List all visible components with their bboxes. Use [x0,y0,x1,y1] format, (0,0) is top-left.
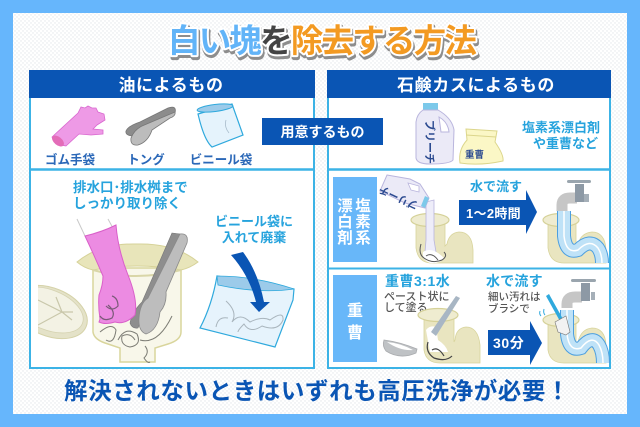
step text: flush: 水で流す [470,179,522,194]
step text: brush small dirt [488,290,541,315]
title: 白い塊を除去する方法 [168,23,476,59]
badge: items to prepare [262,118,383,145]
step label: baking soda [333,275,377,362]
water flow [567,310,603,363]
tilted bottle: ブリーチ [377,183,420,212]
step text: brush small dirt: 細い汚れは [488,290,541,303]
panel: soap scum [327,70,611,368]
hair in trap [420,244,446,263]
illustration: drain with glove and tongs [38,218,199,363]
step text: apply as paste: して塗る [384,300,428,314]
caption: remove down to the trap: しっかり取り除く [73,195,181,211]
icon: tongs [126,107,175,145]
drain lid [38,284,88,340]
illustration: faucet and trap flushing [543,180,606,263]
illustration: paste dish [383,340,417,356]
label: tongs: トング [127,152,165,167]
poured stream [425,200,436,252]
label: plastic bag: ビニール袋 [190,152,253,167]
step text: apply as paste: ペースト状に [384,289,449,303]
illustration: plastic bag with waste [200,276,294,347]
step label: bleach: 素 [355,213,371,231]
badge: items to prepare: 用意するもの [280,124,364,140]
step text: baking soda mix: 重曹3:1水 [385,273,450,289]
panel heading: oil [29,70,315,98]
icon: rubber glove [50,106,105,149]
trap [411,214,473,263]
step label: bleach: 剤 [337,229,353,247]
step label: bleach: 系 [355,229,371,247]
step label: bleach: 塩 [355,197,371,215]
arrow: 1 to 2 hours: 1〜2時間 [466,206,521,221]
icon: baking soda bag [460,129,503,164]
icon: bleach bottle [416,103,454,164]
hand in glove [77,219,136,324]
caption: remove down to the trap [73,179,188,211]
step label: baking soda: 曹 [347,324,363,342]
illustration: trap with paste [418,296,480,363]
step text: brush small dirt: ブラシで [488,302,530,315]
panel: oil [5,70,315,368]
arrow: into bag [231,252,270,312]
panel heading: soap scum: 石鹸カスによるもの [397,76,555,95]
faucet [567,279,596,308]
step text: apply as paste [384,289,449,314]
step label: baking soda: 重 [347,302,363,320]
arrow: 1 to 2 hours [459,190,537,234]
title: 白い塊を除去する方法 [169,26,477,62]
bottom message: 解決されないときはいずれも高圧洗浄が必要！ [64,377,570,404]
icon: bleach bottle: ブリーチ [423,120,437,164]
arrow: 30 minutes: 30分 [493,335,524,351]
caption: remove down to the trap: 排水口･排水桝まで [73,179,188,195]
panel heading: oil: 油によるもの [118,76,224,95]
water flow [564,211,602,263]
step text: flush: 水で流す [486,273,543,289]
step label: bleach: 漂 [337,197,353,215]
drain body [77,244,198,362]
note: bleach or baking soda [522,120,600,151]
title: 白い塊を除去する方法 [168,23,476,59]
caption: throw away in plastic bag: 入れて廃棄 [222,230,286,245]
label: rubber gloves: ゴム手袋 [45,152,95,167]
brush [540,294,570,335]
faucet [562,180,591,211]
note: bleach or baking soda: や重曹など [533,136,598,151]
icon: baking soda bag: 重曹 [465,149,484,161]
note: bleach or baking soda: 塩素系漂白剤 [522,120,600,135]
step label: bleach: 白 [337,213,353,231]
caption: throw away in plastic bag: ビニール袋に [215,214,293,229]
icon: plastic bag [197,102,243,147]
hair clumps [100,316,172,362]
step label: bleach [333,177,377,262]
illustration: faucet, brush and trap [540,279,606,363]
panel heading: soap scum [327,70,611,98]
arrow: 30 minutes [488,321,542,365]
tongs large [130,233,187,334]
caption: throw away in plastic bag [215,214,293,245]
illustration: bleach poured in trap [377,175,473,263]
